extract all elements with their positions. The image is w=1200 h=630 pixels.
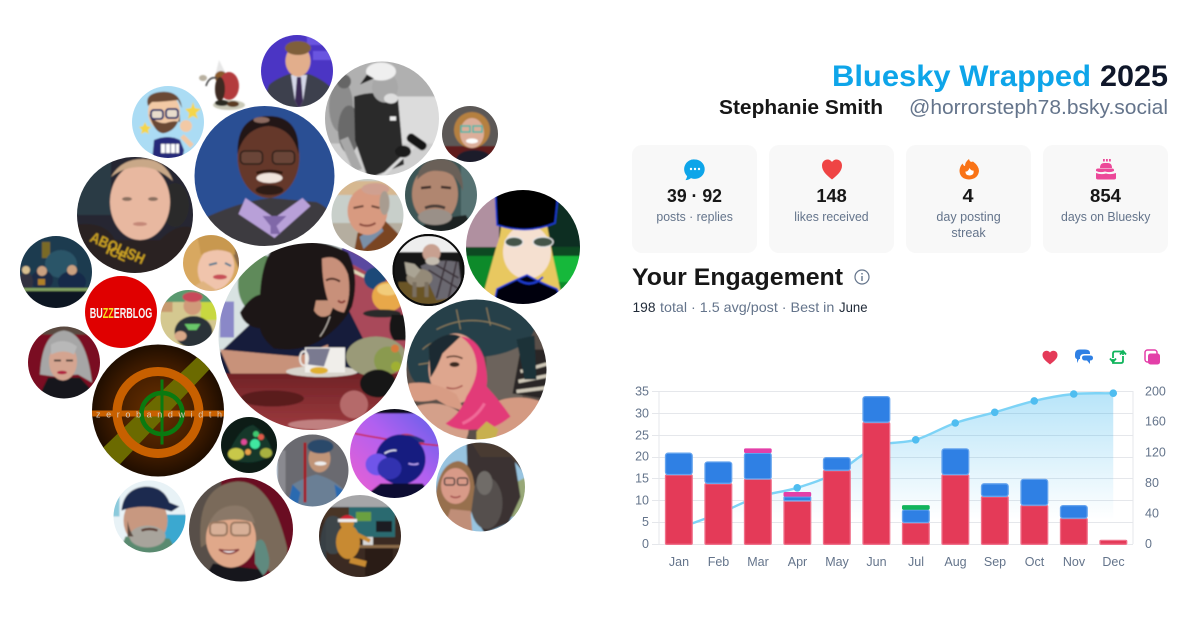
right axis labels: 40 (1145, 506, 1159, 520)
avatar: woman in black Abolish shirt: ICE (104, 242, 130, 265)
avatar: orange cat in santa hat at a computer (319, 495, 401, 577)
right axis labels: 160 (1145, 414, 1166, 428)
left axis labels: 15 (635, 472, 649, 486)
avatar: smiling woman with glasses and long grey hair (187, 476, 295, 584)
stat card: likes received: likes received (794, 210, 869, 224)
left axis labels: 25 (635, 428, 649, 442)
green repost bar (902, 505, 930, 510)
avatar: man in green shirt at a colourful stand (160, 290, 216, 346)
avatar: woman with grey hair on red background (28, 326, 100, 398)
avatar: black and white man with cap and microphone (325, 62, 439, 176)
icon: reposts arrows (1110, 351, 1126, 363)
month labels: Oct (1025, 555, 1045, 569)
avatar: woman in black Abolish shirt (73, 155, 197, 275)
stat card: days on Bluesky: days on Bluesky (1061, 210, 1151, 224)
pink quote bars (744, 448, 811, 497)
stat card: posts and replies: posts · replies (656, 210, 733, 224)
engagement summary: 198 (632, 299, 656, 315)
left axis labels (635, 384, 649, 551)
avatar: zerobandwidth logo: zerobandwidth (96, 410, 222, 420)
right axis labels: 0 (1145, 537, 1152, 551)
avatar: blue monkey on magenta background (348, 408, 440, 500)
title: 2025 (1100, 60, 1168, 93)
avatar: man in plaid shirt with wolf (392, 234, 464, 306)
icon: flame (960, 159, 979, 180)
title: Bluesky Wrapped (832, 60, 1091, 93)
month labels: Jun (866, 555, 887, 569)
month labels: Mar (747, 555, 769, 569)
avatar: man with grey stubble (405, 159, 477, 231)
avatar: three men at a panel table (20, 236, 92, 308)
month labels: Feb (708, 555, 729, 569)
cumulative points (793, 389, 1117, 492)
avatar: curly-haired woman at a table with a cup (216, 240, 408, 434)
avatar: Buzzerblog logo (85, 276, 157, 348)
user name and handle: Stephanie Smith (719, 97, 883, 119)
avatar: bearded man in navy cap by the ocean (114, 480, 186, 552)
stat card: posts and replies (632, 145, 757, 253)
engagement summary: June (839, 299, 868, 315)
left axis labels: 35 (635, 384, 649, 398)
left axis labels: 0 (642, 537, 649, 551)
avatar: woman with pink hair and celestial hat (406, 300, 546, 440)
icon: quotes squares (1145, 350, 1160, 364)
avatar: zerobandwidth logo (90, 342, 226, 478)
month labels: Jan (669, 555, 689, 569)
red likes bars (666, 423, 1127, 544)
month labels: May (825, 555, 850, 569)
stat card: day posting streak (906, 145, 1031, 253)
cumulative area (679, 393, 1113, 544)
left axis labels: 20 (635, 450, 649, 464)
avatar: anime character with black hat and sunglasses (463, 187, 583, 307)
month labels (669, 555, 1125, 569)
avatar: smiling man in cap and henley (276, 434, 348, 506)
avatar: woman in black Abolish shirt: ABOLISH (87, 229, 147, 268)
right axis labels: 120 (1145, 446, 1166, 460)
icon: chat bubble (684, 159, 705, 180)
month labels: Jul (908, 555, 924, 569)
avatar: red robed gnome figurine (199, 60, 245, 110)
month labels: Nov (1063, 555, 1086, 569)
avatar: blonde woman smiling (183, 235, 239, 291)
heading: Your Engagement: Your Engagement (632, 264, 843, 291)
avatar: woman with a dark horse (434, 441, 526, 533)
avatar: older man in brown jacket by the sea (332, 179, 404, 251)
right axis labels (1145, 384, 1166, 551)
stat card: day posting streak: streak (951, 226, 986, 240)
legend icons (1042, 350, 1160, 364)
engagement summary: total · 1.5 avg/post · Best in (660, 299, 834, 315)
stat card: days on Bluesky (1043, 145, 1168, 253)
icon: replies chat (1075, 350, 1093, 364)
avatar: smiling man with glasses on blue background (194, 106, 334, 246)
avatar: Buzzerblog logo: BUZZERBLOG (90, 306, 152, 322)
avatar: man in suit on purple background (261, 35, 333, 107)
icon: birthday cake (1096, 159, 1116, 180)
left axis labels: 10 (635, 494, 649, 508)
user name and handle: @horrorsteph78.bsky.social (909, 97, 1168, 119)
avatar: cartoon memoji with glasses and stars (132, 86, 204, 158)
stat card: likes received: 148 (816, 185, 847, 206)
user name and handle (719, 97, 1168, 119)
avatar: woman with curly red hair and teal glasses (442, 106, 498, 162)
month labels: Sep (984, 555, 1006, 569)
icon: heart (822, 160, 842, 180)
avatar: glowing green lights (221, 417, 277, 473)
stat card: day posting streak: 4 (962, 185, 974, 206)
stat card: day posting streak: day posting (936, 210, 1001, 224)
stat card: likes received (769, 145, 894, 253)
month labels: Apr (788, 555, 807, 569)
icon: likes heart (1042, 351, 1058, 364)
chart grid (652, 391, 1133, 544)
cumulative line (679, 393, 1113, 528)
stat card: days on Bluesky: 854 (1090, 185, 1122, 206)
blue replies bars (666, 397, 1087, 522)
month labels: Aug (944, 555, 967, 569)
left axis labels: 30 (635, 406, 649, 420)
month labels: Dec (1102, 555, 1125, 569)
right axis labels: 80 (1145, 476, 1159, 490)
avatar cluster (16, 31, 583, 584)
chart: monthly engagement stacked bars with cumulative line (635, 384, 1166, 569)
right axis labels: 200 (1145, 384, 1166, 398)
stat card: posts and replies: 39 · 92 (667, 185, 722, 206)
icon: info (855, 270, 869, 284)
left axis labels: 5 (642, 515, 649, 529)
